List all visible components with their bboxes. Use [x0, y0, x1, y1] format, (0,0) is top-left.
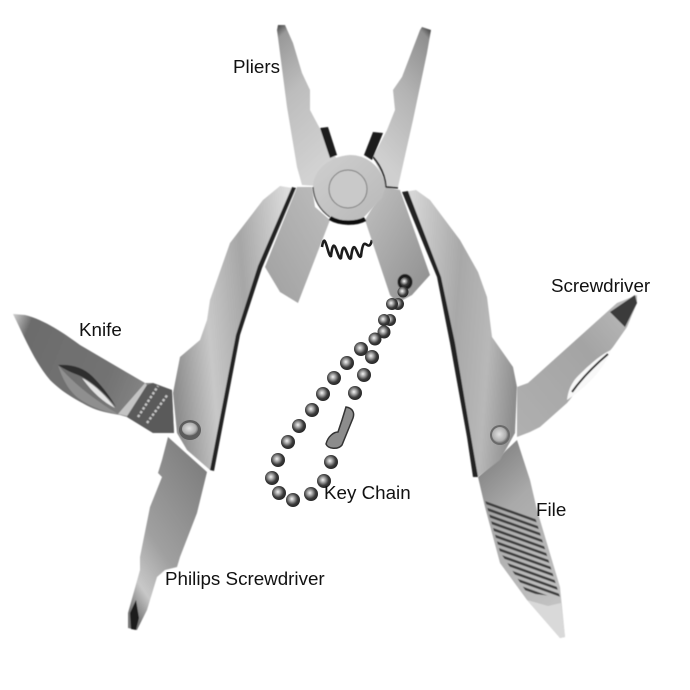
label: Philips Screwdriver: Philips Screwdriver — [165, 568, 325, 589]
right jaw dark insert — [364, 132, 383, 160]
label: Key Chain: Key Chain — [324, 482, 411, 503]
label: File: File — [536, 499, 566, 520]
key chain clasp — [326, 407, 354, 448]
label: Screwdriver: Screwdriver — [551, 275, 650, 296]
rivet: left handle — [179, 420, 201, 440]
left jaw — [277, 25, 340, 186]
spring — [322, 240, 372, 259]
tool: Philips screwdriver — [128, 437, 207, 630]
plier jaws — [277, 25, 431, 187]
plier right plate — [365, 187, 430, 303]
rivet: right handle — [490, 425, 510, 445]
tool: screwdriver — [517, 295, 637, 437]
plier pivot hub — [313, 155, 398, 223]
plier left plate — [265, 187, 330, 303]
label: Knife: Knife — [79, 319, 122, 340]
tool: file — [478, 440, 566, 638]
key chain — [265, 277, 410, 507]
left jaw dark insert — [320, 127, 337, 158]
label: Pliers: Pliers — [233, 56, 280, 77]
tool: knife — [13, 314, 174, 433]
right jaw — [373, 27, 431, 187]
right handle — [402, 190, 517, 477]
left handle — [173, 186, 296, 471]
